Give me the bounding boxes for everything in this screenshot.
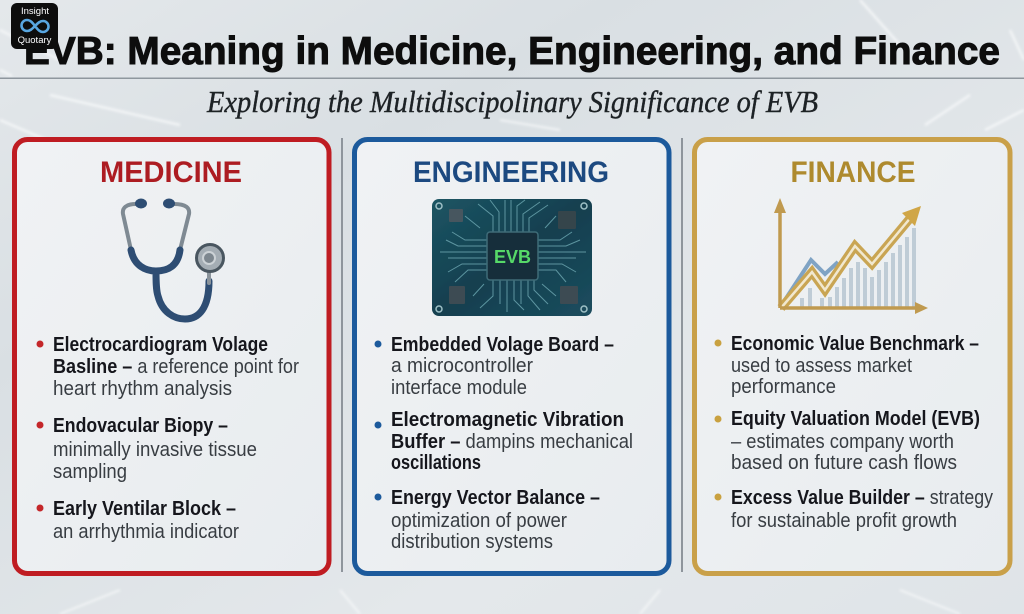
title: EVB: Meaning in Medicine, Engineering, and Finance <box>24 30 1000 73</box>
list: engineering: Embedded Volage Board – <box>391 334 614 356</box>
list: medicine: sampling <box>53 461 127 483</box>
list: engineering: interface module <box>391 377 527 399</box>
icon: growth chart <box>774 198 928 314</box>
list: engineering: Buffer – dampins mechanical <box>391 431 633 453</box>
list: medicine: heart rhythm analysis <box>53 378 232 400</box>
list: medicine: Endovacular Biopy – <box>53 415 228 437</box>
heading: engineering: ENGINEERING <box>413 156 609 189</box>
list: medicine: Electrocardiogram Volage <box>53 334 268 356</box>
list: finance: Equity Valuation Model (EVB) <box>731 408 980 430</box>
list: finance: performance <box>731 376 836 398</box>
list: engineering: distribution systems <box>391 531 553 553</box>
list: medicine: minimally invasive tissue <box>53 439 257 461</box>
subtitle: Exploring the Multidiscipolinary Significance of EVB <box>206 84 818 119</box>
divider left <box>341 138 343 572</box>
divider right <box>681 138 683 572</box>
icon: stethoscope <box>123 198 224 319</box>
list: medicine: Basline – a reference point for <box>53 356 299 378</box>
list: engineering: optimization of power <box>391 510 567 532</box>
list: medicine <box>36 334 299 543</box>
list: medicine: Early Ventilar Block – <box>53 498 236 520</box>
list: medicine: an arrhythmia indicator <box>53 521 239 543</box>
list: engineering: Electromagnetic Vibration <box>391 409 624 431</box>
list: finance <box>714 333 993 532</box>
panel: engineering <box>354 140 669 574</box>
list: finance: Excess Value Builder – strategy <box>731 487 993 509</box>
heading: finance: FINANCE <box>790 156 916 189</box>
list: engineering: Energy Vector Balance – <box>391 487 600 509</box>
icon: EVB circuit board <box>432 199 592 316</box>
panel: finance <box>694 140 1010 574</box>
list: finance: Economic Value Benchmark – <box>731 333 979 355</box>
list: finance: based on future cash flows <box>731 452 957 474</box>
list: finance: – estimates company worth <box>731 431 954 453</box>
list: finance: for sustainable profit growth <box>731 510 957 532</box>
list: engineering: oscillations <box>391 452 481 474</box>
heading: medicine: MEDICINE <box>100 156 242 189</box>
list: engineering <box>374 334 633 553</box>
logo badge: Insight <box>21 6 49 17</box>
list: engineering: a microcontroller <box>391 355 533 377</box>
logo badge: Quotary <box>18 35 52 46</box>
list: finance: used to assess market <box>731 355 912 377</box>
panel: medicine <box>14 140 329 574</box>
header rule <box>0 78 1024 79</box>
icon: EVB circuit board: EVB <box>494 247 531 267</box>
logo badge <box>11 3 58 49</box>
